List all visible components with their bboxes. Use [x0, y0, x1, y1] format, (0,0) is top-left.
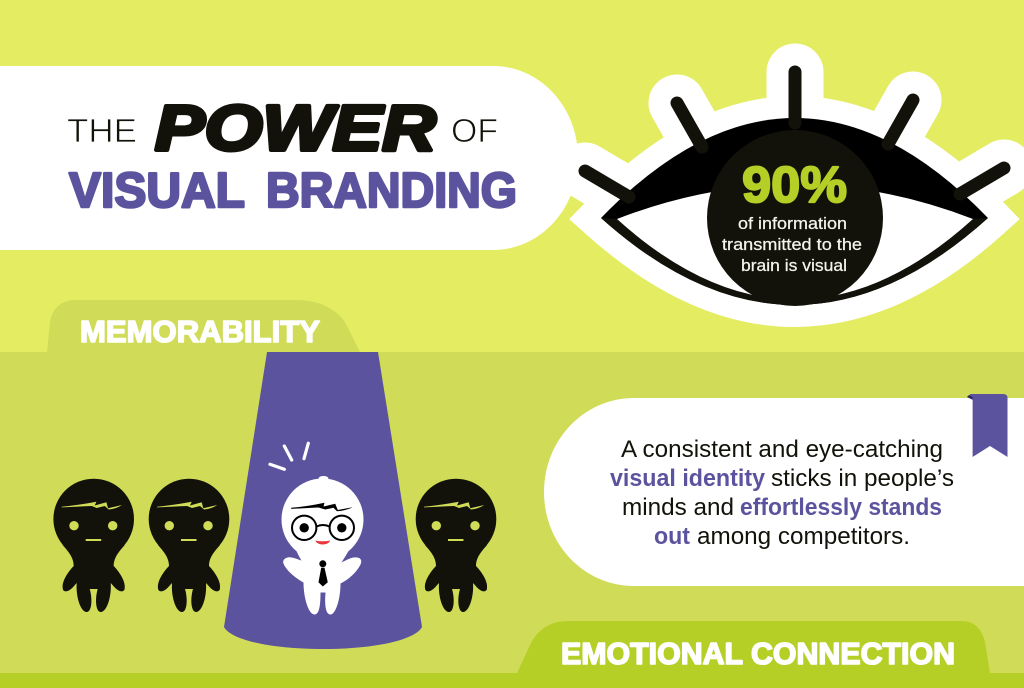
eye outer shape: [601, 118, 988, 305]
bookmark icon: [967, 394, 1008, 457]
eye graphic: [585, 72, 1004, 306]
stat caption: transmitted to the: [722, 236, 862, 254]
title word: THE: THE: [67, 112, 137, 149]
description text: out: [654, 523, 690, 550]
stat caption: brain is visual: [741, 257, 847, 275]
top background: [0, 0, 1024, 352]
title word: BRANDING: BRANDING: [266, 164, 517, 218]
spotlight: [224, 352, 422, 649]
title word: VISUAL: VISUAL: [69, 164, 245, 218]
description text: A consistent and eye-catching: [621, 436, 943, 463]
stat: 90%: 90%: [742, 156, 847, 213]
title word: OF: OF: [451, 112, 498, 149]
eye white halo: [585, 72, 1004, 305]
description text: among competitors.: [697, 523, 910, 550]
stat caption: of information: [738, 215, 847, 233]
description text: sticks in people’s: [771, 465, 954, 492]
dark character 3: [416, 479, 496, 612]
description text: effortlessly stands: [740, 494, 942, 521]
eye white: [617, 184, 973, 300]
memorability tab: [47, 300, 360, 352]
heading: MEMORABILITY: MEMORABILITY: [80, 314, 320, 349]
emotional connection tab: [517, 621, 990, 673]
stat caption: [722, 215, 862, 275]
emphasis sparks: [270, 443, 308, 469]
description text: [610, 436, 954, 550]
dark character 1: [53, 479, 134, 612]
eyelashes: [585, 72, 1004, 197]
bottom band: [0, 673, 1024, 688]
iris circle: [707, 130, 883, 306]
title banner: [0, 66, 578, 250]
white character with glasses: [282, 476, 364, 614]
title word: POWER: POWER: [155, 92, 436, 164]
lower lid: [601, 218, 988, 305]
memorability panel background: [0, 352, 1024, 673]
title: [67, 92, 517, 218]
heading: EMOTIONAL CONNECTION: EMOTIONAL CONNECTION: [561, 636, 955, 671]
dark character 2: [149, 479, 229, 612]
description card: [544, 398, 1024, 586]
description text: minds and: [622, 494, 734, 521]
description text: visual identity: [610, 465, 766, 492]
